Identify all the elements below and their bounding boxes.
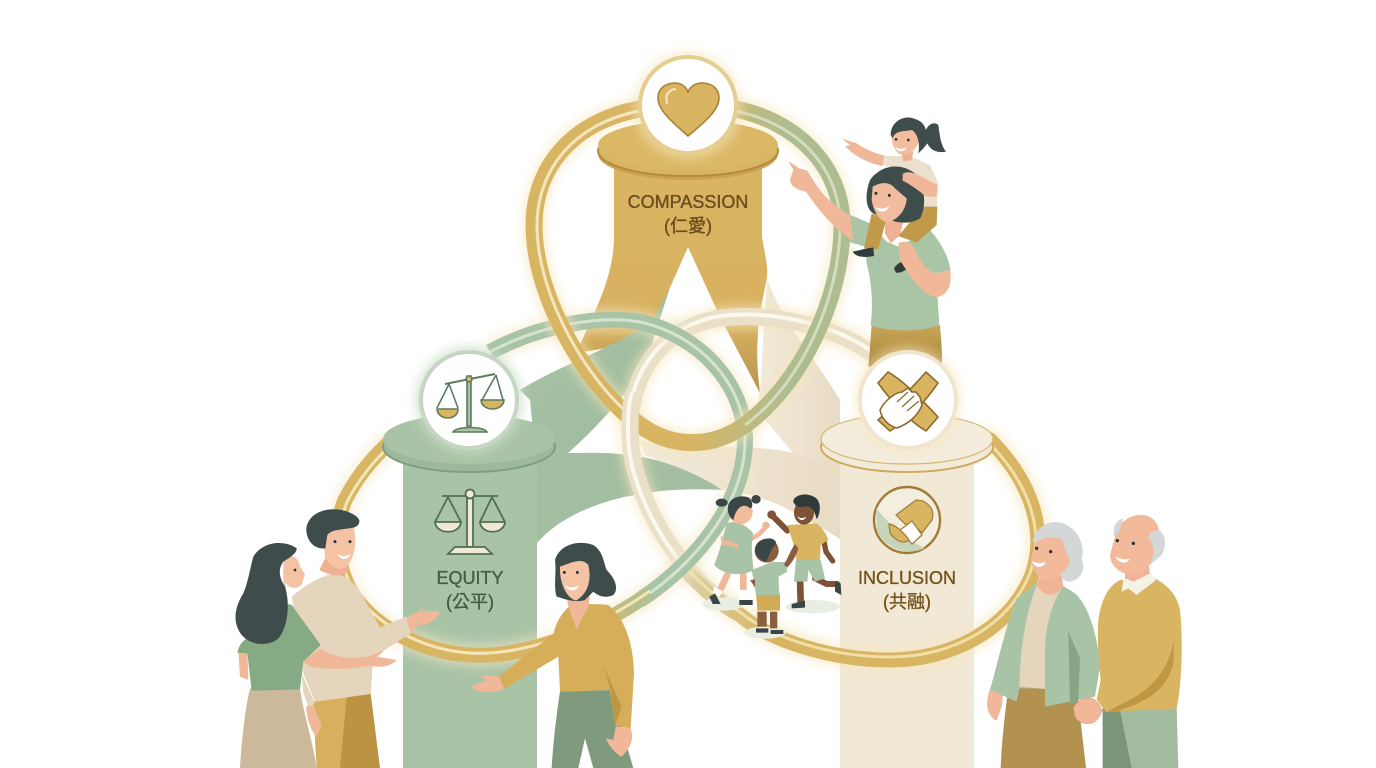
equity pillar cap xyxy=(383,414,555,472)
man collar xyxy=(1122,572,1156,595)
equity pillar column xyxy=(403,455,537,768)
girl shoes xyxy=(853,247,874,257)
woman skirt xyxy=(1001,687,1086,768)
man trousers xyxy=(313,697,347,768)
woman face xyxy=(283,556,305,603)
woman back arm xyxy=(238,652,248,680)
ring overlap: cream ring over gold loop xyxy=(628,392,636,474)
woman hair xyxy=(235,543,297,644)
people: children playing xyxy=(703,494,841,639)
girl hair xyxy=(891,117,946,153)
hanging hand xyxy=(606,727,632,757)
man sweater xyxy=(292,573,411,702)
girl neck and face xyxy=(902,152,913,162)
mother hair xyxy=(867,167,924,223)
girl trousers xyxy=(864,207,937,249)
ring: equity (sage to gold) xyxy=(337,320,745,655)
label: equity: EQUITY xyxy=(436,568,504,588)
woman neck xyxy=(1037,575,1063,595)
girl pointing arm xyxy=(842,138,884,166)
mother shirt xyxy=(848,214,951,330)
boy running xyxy=(767,494,841,608)
neck xyxy=(567,597,590,629)
ring: inclusion (cream to gold) xyxy=(628,315,1038,660)
icon: inclusion handshake badge xyxy=(874,487,940,553)
woman hand xyxy=(987,690,1003,721)
medallion: heart xyxy=(634,51,742,159)
girl in dress xyxy=(709,495,770,605)
reaching hand xyxy=(472,675,504,692)
icon: stacked hands xyxy=(878,372,938,431)
girl resting arm xyxy=(903,172,937,197)
mother pointing arm xyxy=(788,161,853,241)
man hanging sleeve and hand xyxy=(302,673,315,707)
label: inclusion: (共融) xyxy=(883,592,931,612)
people: elderly couple xyxy=(987,515,1182,768)
man face xyxy=(323,526,355,569)
small boy seen from behind xyxy=(750,538,798,634)
face xyxy=(560,561,590,601)
woman blouse xyxy=(237,603,321,691)
woman skirt xyxy=(240,688,317,768)
woman cardigan xyxy=(990,583,1100,707)
icon: equity scale on column xyxy=(435,490,505,554)
icon: tilted scale xyxy=(437,374,504,432)
man neck xyxy=(1125,563,1150,582)
girl shirt xyxy=(882,156,938,209)
label: inclusion xyxy=(858,568,956,612)
label: compassion xyxy=(628,192,748,236)
ground shadows xyxy=(703,597,744,611)
hair xyxy=(555,543,616,601)
woman inner top xyxy=(1019,585,1063,689)
mother other arm xyxy=(898,242,951,297)
medallion: balance scale xyxy=(415,346,523,454)
man hair xyxy=(1148,530,1165,565)
icon: heart xyxy=(658,83,719,136)
label: equity: (公平) xyxy=(446,592,494,612)
man hair xyxy=(306,509,359,549)
woman front arm xyxy=(303,648,397,669)
man neck xyxy=(319,557,348,575)
woman hair xyxy=(1033,522,1083,582)
clasped hands xyxy=(1073,698,1102,724)
mother trousers xyxy=(868,325,942,367)
ring: compassion (gold to sage) xyxy=(534,108,842,443)
medallion: joined hands xyxy=(854,346,962,454)
shaded side xyxy=(603,665,622,726)
label: equity xyxy=(436,568,504,612)
label: compassion: COMPASSION xyxy=(628,192,748,212)
blouse xyxy=(498,603,634,728)
man sweater xyxy=(1097,578,1182,712)
people: woman reaching out xyxy=(472,543,634,768)
mother face xyxy=(872,183,907,222)
man head xyxy=(1110,515,1160,575)
man trousers xyxy=(1103,707,1178,768)
people: mother carrying girl xyxy=(788,117,951,367)
inclusion pillar column xyxy=(840,455,974,768)
cardigan shadow xyxy=(1068,632,1080,705)
trousers xyxy=(552,690,633,768)
green swoosh behind pillars xyxy=(520,287,722,543)
cream swoosh behind pillars xyxy=(640,277,842,540)
compassion pillar cap xyxy=(598,120,778,180)
inclusion pillar cap xyxy=(821,414,993,472)
man hand xyxy=(406,606,441,633)
people: couple on the left xyxy=(235,509,441,768)
woman face xyxy=(1031,537,1070,580)
label: compassion: (仁愛) xyxy=(664,216,712,236)
mother neck xyxy=(885,218,903,243)
compassion pillar body with legs xyxy=(577,165,767,393)
label: inclusion: INCLUSION xyxy=(858,568,956,588)
